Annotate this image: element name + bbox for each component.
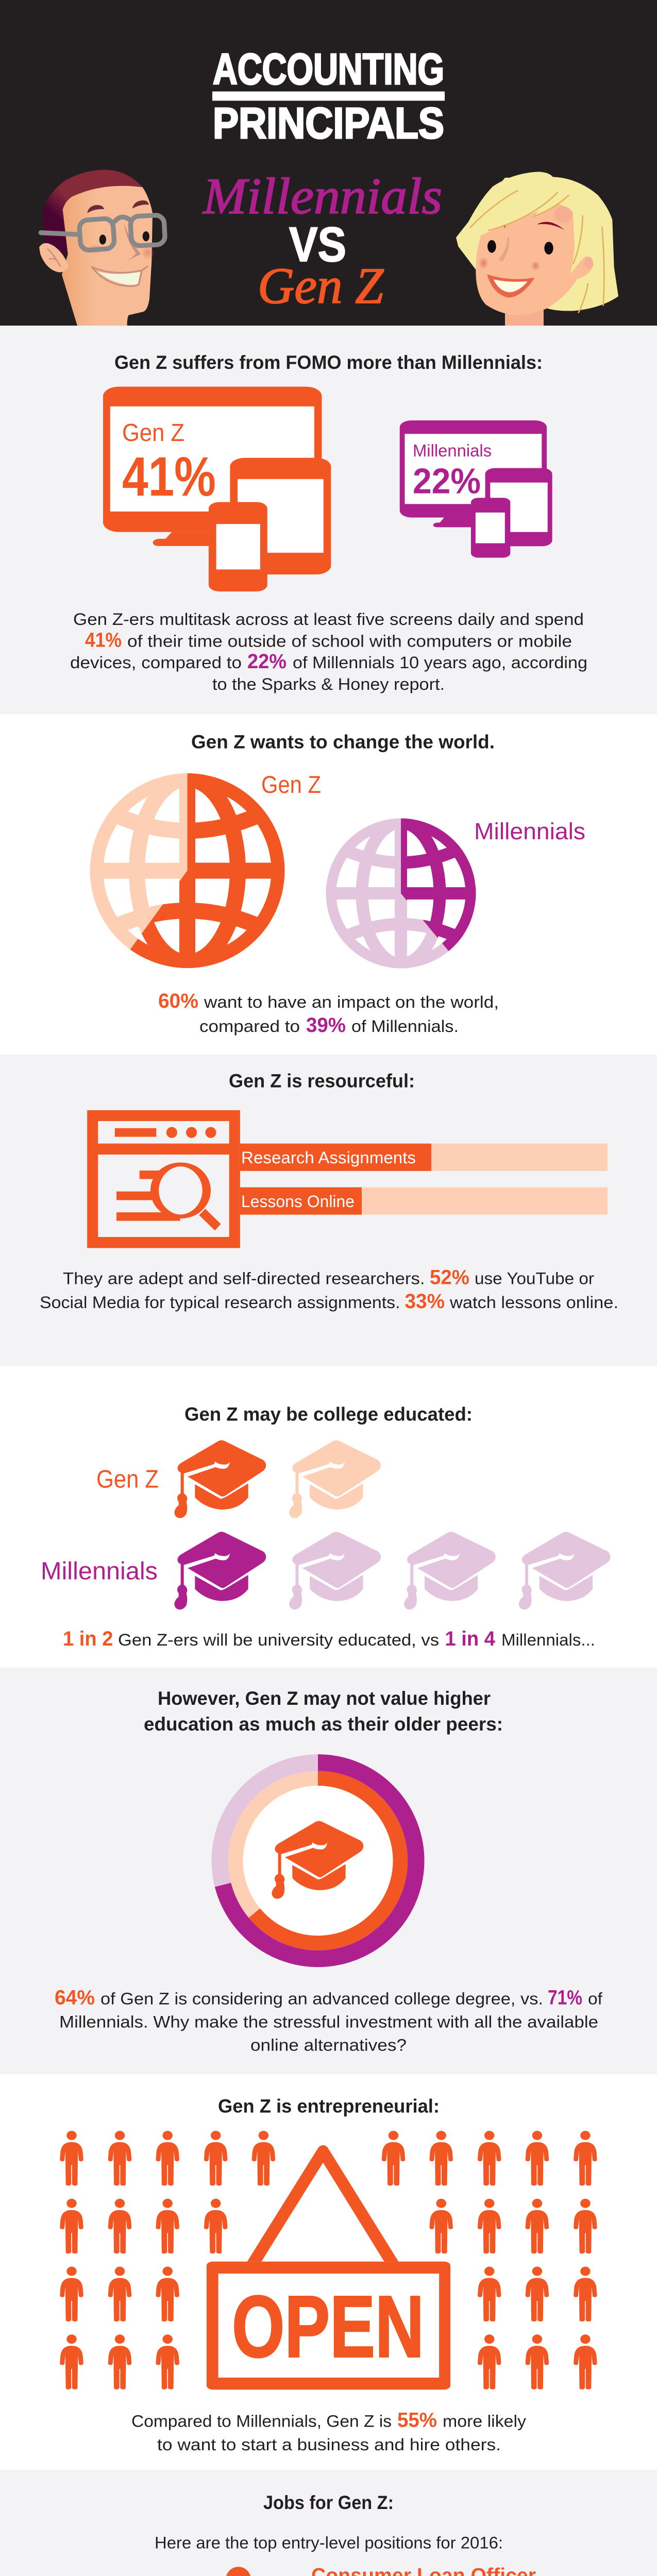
text block: of Gen Z is considering an advanced college degree, vs. [100,1990,543,2008]
icon: Gen Z blonde woman [456,172,618,326]
text block: of [588,1990,602,2008]
text block: Gen Z-ers will be university educated, vs [118,1631,439,1649]
text block: Gen Z-ers multitask across at least five screens daily and spend [73,610,584,629]
text block: devices, compared to [70,653,242,672]
stat: Millennials 22% [413,441,492,501]
logo: Accounting Principals: ACCOUNTING [213,45,444,93]
text block: Compared to Millennials, Gen Z is [131,2412,392,2431]
text block: 52% [430,1266,469,1289]
text block: 1 in 4 [445,1628,496,1650]
text block: watch lessons online. [449,1293,618,1312]
text block: 41% [85,629,122,651]
logo: Accounting Principals [212,45,445,147]
icon: graduation cap [272,1821,363,1899]
panel: entrepreneurial [60,2096,597,2454]
panel: FOMO [70,352,587,693]
text block: They are adept and self-directed researchers. [63,1269,425,1288]
text block: to the Sparks & Honey report. [212,675,445,693]
panel: jobs [39,2492,603,2576]
text block: more likely [443,2412,526,2431]
panel: college educated [41,1403,611,1650]
label: Gen Z: Gen Z [96,1466,159,1494]
icon: org chart [102,2567,263,2576]
text block: 33% [405,1290,445,1313]
stat: Gen Z 41%: 41% [122,445,216,507]
icon: open sign [207,2145,450,2389]
label: Millennials: Millennials [474,818,585,844]
text block: Millennials. Why make the stressful investment with all the available [59,2013,598,2031]
text block: of Millennials 10 years ago, according [293,653,587,672]
heading: Gen Z may be college educated: [184,1403,473,1425]
text block: 60% [158,990,198,1012]
title: Millennials vs Gen Z: Millennials [202,167,442,225]
heading: Gen Z wants to change the world. [191,732,495,752]
stat: Millennials 22%: 22% [413,461,481,501]
text block: of their time outside of school with computers or mobile [127,632,572,650]
panel: resourceful [40,1071,618,1313]
text block [63,1628,595,1650]
icon: Millennial devices [400,420,552,558]
stat: Gen Z 41%: Gen Z [122,419,184,447]
stat: Millennials 22%: Millennials [413,441,492,460]
text block [40,1266,618,1313]
heading [144,1688,503,1735]
text block: 64% [55,1987,95,2009]
text block: use YouTube or [475,1269,594,1288]
panel: header [39,45,618,326]
text block [70,610,587,693]
label: Gen Z: Gen Z [261,771,321,798]
icon: open sign: OPEN [232,2278,424,2376]
stat: Gen Z 41% [122,419,216,507]
text block [55,1987,602,2055]
panel: change the world [90,732,585,1037]
label: Millennials: Millennials [41,1558,158,1585]
text block: 55% [397,2409,437,2432]
text block [158,990,499,1037]
icon grid: people [60,2131,597,2389]
icon row: Gen Z 1 in 2 caps [174,1440,381,1518]
heading: Gen Z suffers from FOMO more than Millennials: [114,352,543,373]
icon row: Millennials 1 in 4 caps [174,1532,611,1609]
text block: compared to [199,1017,300,1036]
text block: 71% [548,1987,582,2009]
subheading: Here are the top entry-level positions for 2016: [155,2534,503,2552]
text block: to want to start a business and hire others. [157,2435,501,2454]
heading: However, Gen Z may not value higher [158,1688,491,1709]
bar chart: research 52%, lessons 33%: Research Assignments [241,1148,416,1167]
title: Millennials vs Gen Z [202,167,442,314]
text block: Social Media for typical research assignments. [40,1293,400,1312]
text block: 39% [306,1014,346,1037]
bar chart: research 52%, lessons 33%: Lessons Online [241,1192,355,1211]
text block: 1 in 2 [63,1628,113,1650]
heading: education as much as their older peers: [144,1714,503,1735]
text block: 22% [247,650,287,673]
chart: donut 71% and 64% [220,1762,416,1959]
text block [131,2409,526,2454]
text block: Millennials... [501,1631,595,1649]
icon: Millennials globe 39% [326,818,476,969]
bar chart: research 52%, lessons 33% [240,1144,608,1215]
icon: browser with magnifier [87,1110,240,1248]
title: Millennials vs Gen Z: Gen Z [258,257,384,314]
text block: of Millennials. [351,1017,459,1036]
text block: want to have an impact on the world, [204,993,499,1011]
text block: online alternatives? [250,2036,407,2055]
icon: Gen Z devices [103,387,331,591]
icon: millennial man with glasses [39,170,165,326]
heading: Gen Z is resourceful: [229,1071,415,1091]
title: Millennials vs Gen Z: VS [289,217,346,272]
icon: Gen Z globe 60% [90,773,284,968]
heading: Jobs for Gen Z: [263,2492,394,2513]
heading: Gen Z is entrepreneurial: [218,2096,440,2116]
panel: higher education [55,1688,602,2055]
logo: Accounting Principals: PRINCIPALS [213,99,444,147]
